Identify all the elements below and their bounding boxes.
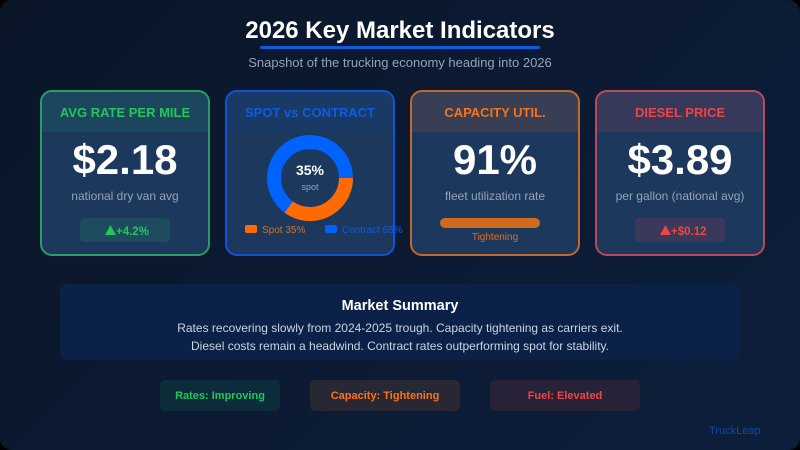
tag: fuel (490, 380, 640, 411)
caption: fleet utilization rate (445, 189, 545, 203)
title: 2026 Key Market Indicators (245, 17, 555, 44)
utilization bar (440, 218, 540, 228)
badge text with up arrow (105, 225, 149, 238)
value: $3.89 (627, 136, 733, 183)
change badge (80, 218, 170, 242)
header band (227, 92, 393, 132)
panel: market summary (60, 284, 740, 360)
title underline (260, 46, 540, 49)
summary heading: Market Summary (342, 298, 458, 314)
card heading: AVG RATE PER MILE (60, 105, 190, 120)
donut chart (267, 135, 353, 221)
panel: capacity utilization (410, 90, 580, 256)
panel: spot vs contract (225, 90, 395, 256)
badge text with up arrow: +$0.12 (671, 226, 706, 238)
tag: capacity (310, 380, 460, 411)
donut value: 35% (296, 162, 324, 178)
tag: rates: Rates: Improving (175, 390, 265, 402)
summary text: Rates recovering slowly from 2024-2025 trough. Capacity tightening as carriers exit. (177, 321, 623, 335)
panel: average rate per mile (40, 90, 210, 256)
brand label: TruckLeap (709, 425, 761, 437)
legend: spot: Spot 35% (262, 225, 305, 236)
summary text: Diesel costs remain a headwind. Contract rates outperforming spot for stability. (191, 339, 609, 353)
summary text (177, 321, 623, 353)
header band (597, 92, 763, 132)
card heading: DIESEL PRICE (635, 105, 725, 120)
donut label: spot (301, 182, 318, 192)
card heading: CAPACITY UTIL. (444, 105, 546, 120)
tag: rates (160, 380, 280, 411)
bar label: Tightening (472, 232, 518, 243)
tag: capacity: Capacity: Tightening (331, 390, 439, 402)
value: 91% (453, 136, 537, 183)
header band (42, 92, 208, 132)
panel: diesel price (595, 90, 765, 256)
tag: fuel: Fuel: Elevated (528, 390, 602, 402)
caption: national dry van avg (71, 189, 179, 203)
value: $2.18 (72, 136, 178, 183)
header band (412, 92, 578, 132)
badge text with up arrow: +4.2% (116, 226, 149, 238)
subtitle: Snapshot of the trucking economy heading into 2026 (248, 55, 552, 70)
legend: contract: Contract 65% (342, 225, 403, 236)
change badge (635, 218, 725, 242)
caption: per gallon (national avg) (616, 189, 744, 203)
card heading: SPOT vs CONTRACT (245, 105, 375, 120)
